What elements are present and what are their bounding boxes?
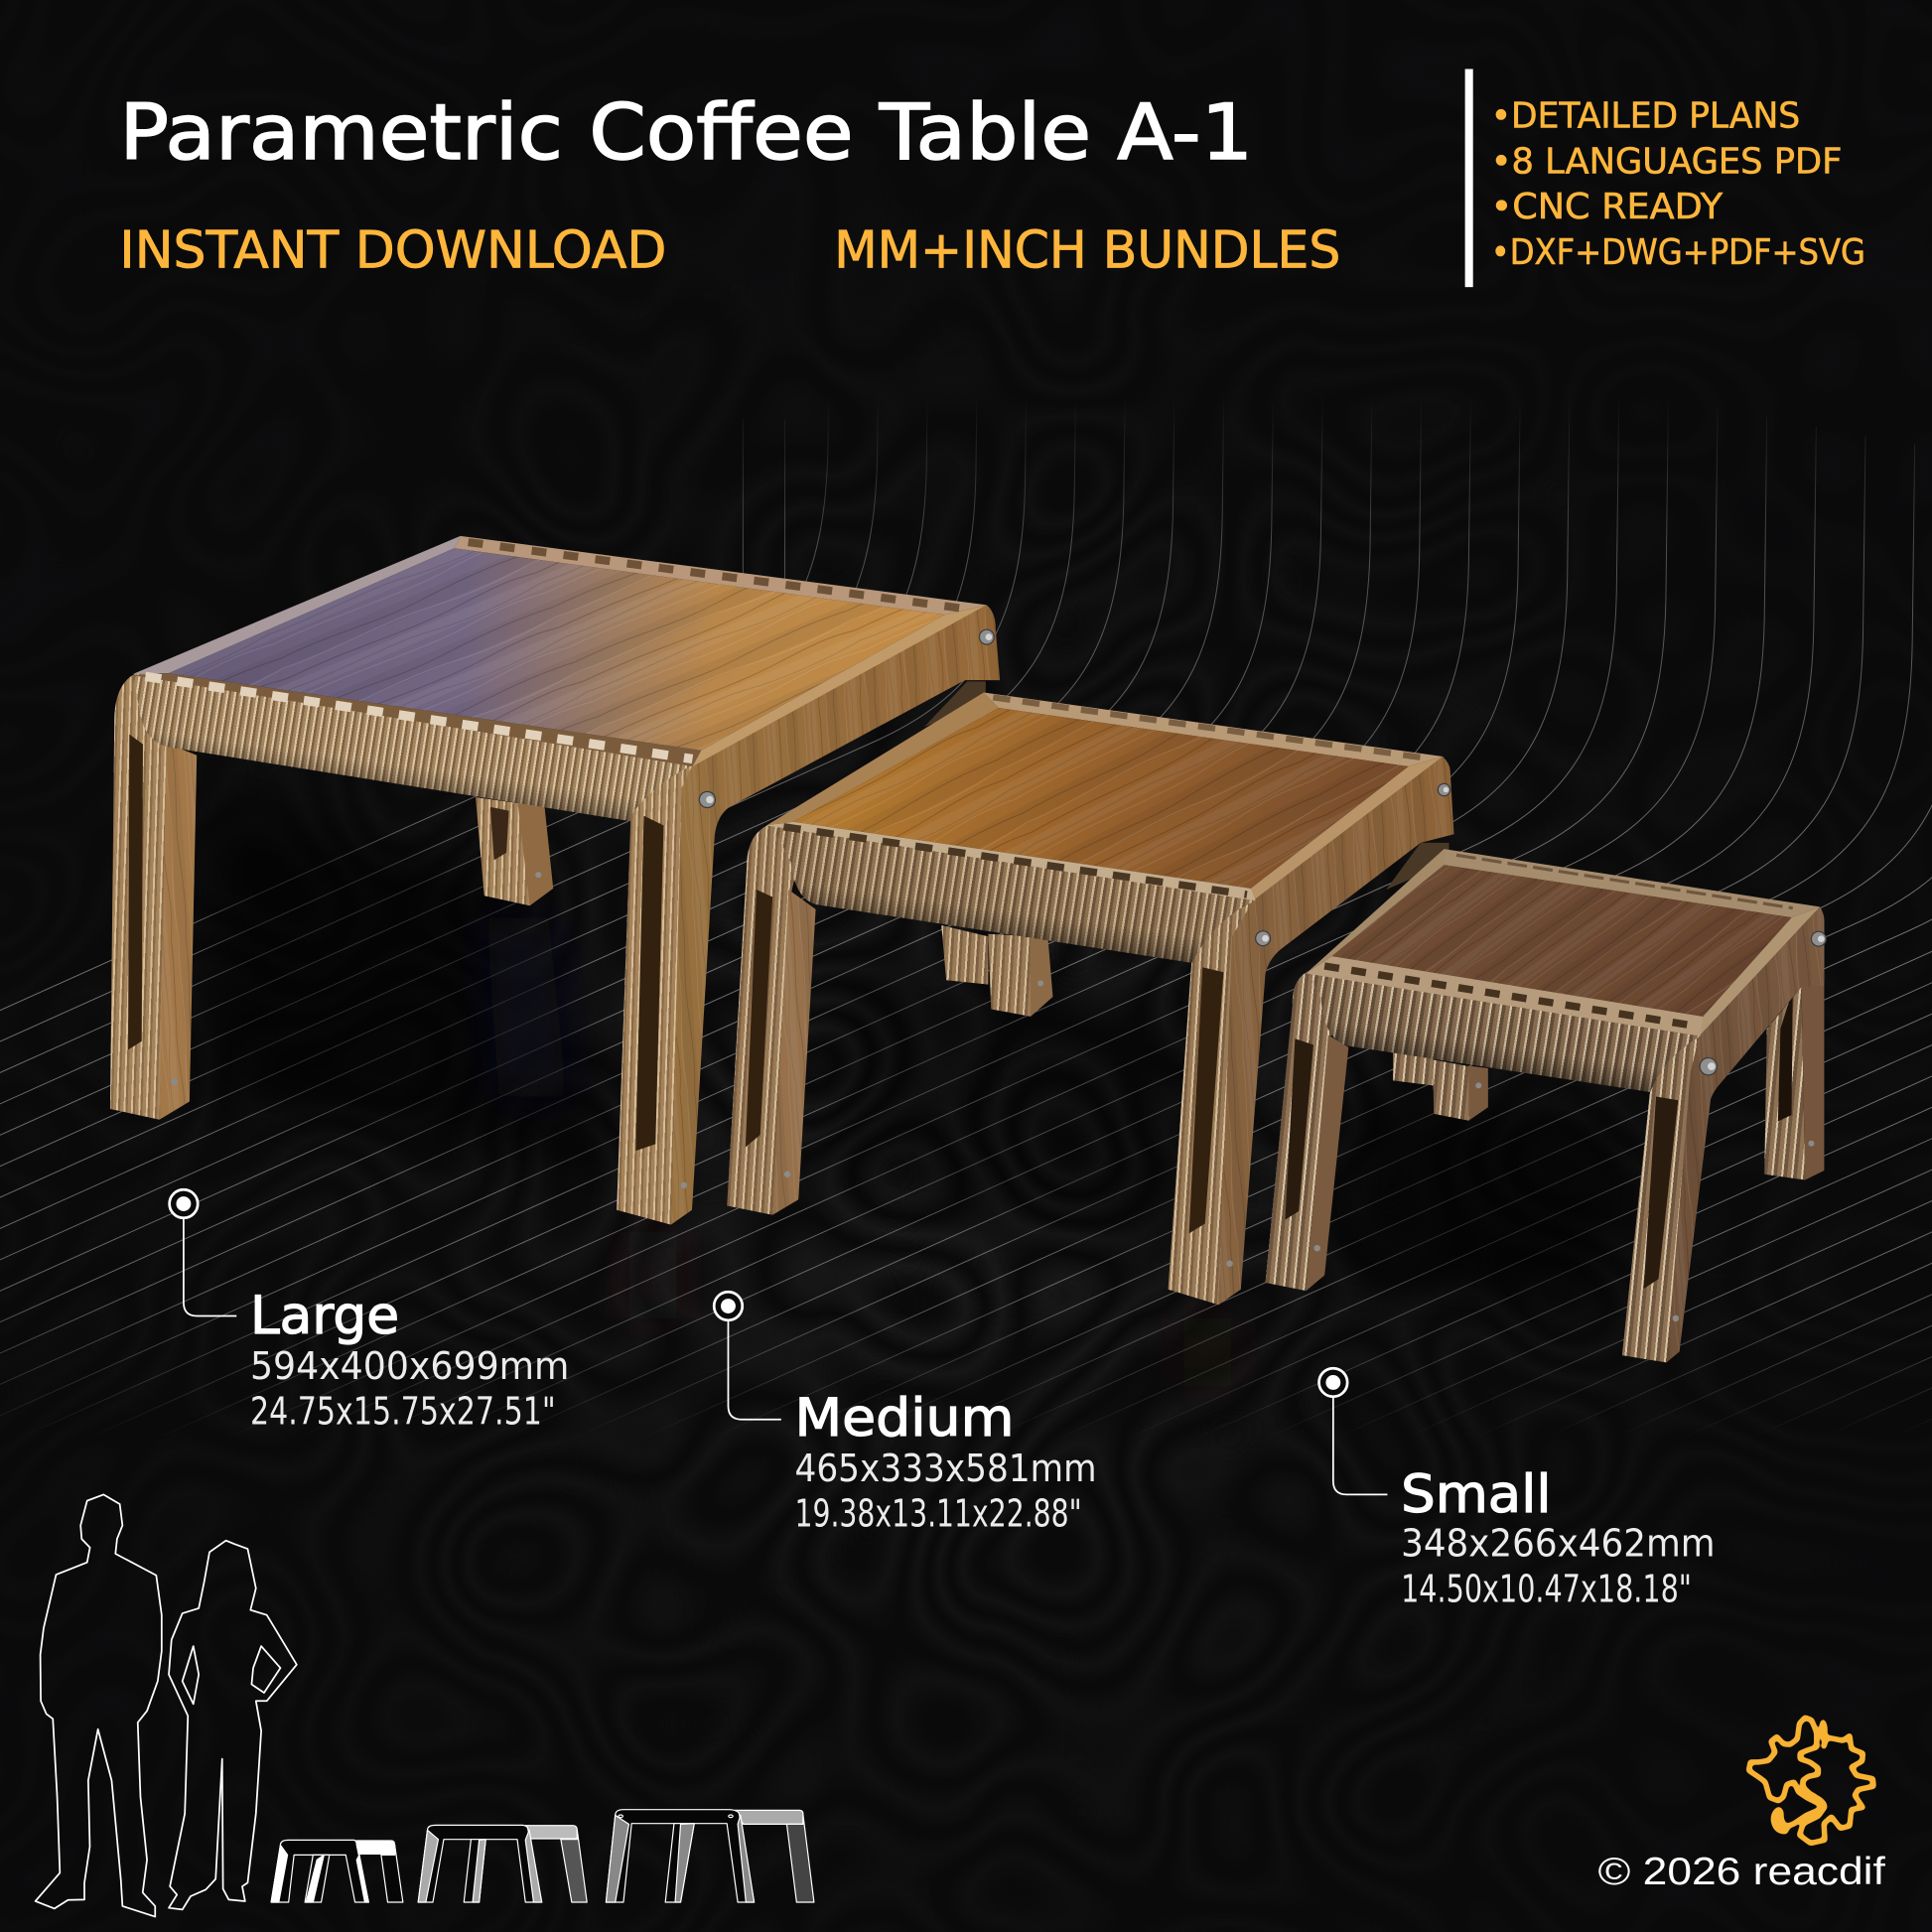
- leader line: large: [184, 1218, 236, 1315]
- medium: front-left leg: [727, 823, 816, 1215]
- table: medium: [727, 692, 1453, 1305]
- marker: small: [1319, 1368, 1347, 1397]
- subheading: bundles: MM+INCH BUNDLES: [834, 220, 1340, 280]
- scale silhouettes: [36, 1494, 297, 1917]
- table: large: [110, 536, 1000, 1225]
- large: rear legs: [476, 681, 986, 905]
- medium: side panel: [1218, 757, 1453, 1305]
- medium: front comb joints: [766, 822, 1256, 900]
- large: slatted front band: [133, 675, 695, 827]
- small: front-left leg: [1266, 970, 1348, 1291]
- leader line: medium: [728, 1320, 781, 1420]
- small: bolts: [1673, 931, 1826, 1321]
- large: front comb joints: [133, 673, 701, 766]
- medium: bolts: [1226, 783, 1450, 1267]
- silhouette: man: [36, 1494, 162, 1917]
- logo: right contour: [1799, 1735, 1873, 1844]
- large: side panel: [671, 605, 1000, 1225]
- medium: rear legs: [941, 843, 1449, 1017]
- mini table outlines: [271, 1810, 814, 1902]
- feature: formats: •DXF+DWG+PDF+SVG: [1491, 232, 1865, 273]
- floor shadows and reflections: [209, 801, 1626, 1386]
- copyright: © 2026 reacdif: [1598, 1851, 1885, 1893]
- large: bolts: [681, 629, 994, 1188]
- marker: medium: [714, 1292, 743, 1320]
- mini table: small: [271, 1840, 403, 1902]
- large: front-left leg: [110, 671, 197, 1120]
- medium: frame rim: [766, 692, 1443, 900]
- feature: languages: •8 LANGUAGES PDF: [1491, 141, 1842, 182]
- small: side panel: [1667, 906, 1824, 1362]
- medium: slatted front band: [771, 824, 1256, 967]
- callout: large: [170, 1189, 569, 1435]
- dimensions: small inch: 14.50x10.47x18.18": [1401, 1567, 1692, 1611]
- feature: detailed plans: •DETAILED PLANS: [1491, 95, 1800, 136]
- feature: cnc: •CNC READY: [1491, 187, 1724, 227]
- small: front comb joints: [1307, 956, 1703, 1036]
- small: frame rim: [1307, 849, 1820, 1036]
- label: medium: Medium: [794, 1389, 1014, 1449]
- small: wood table top: [1332, 865, 1792, 1017]
- large: front-right leg: [617, 763, 705, 1225]
- dimensions: medium mm: 465x333x581mm: [794, 1447, 1097, 1491]
- marker: large: [170, 1189, 198, 1218]
- callout: small: [1319, 1368, 1716, 1611]
- logo: drop tip bottom: [1771, 1807, 1791, 1834]
- large: frame rim: [133, 536, 987, 766]
- label: large: Large: [250, 1287, 399, 1346]
- medium: front-right leg: [1169, 900, 1267, 1305]
- feature list: [1491, 95, 1865, 273]
- large: back comb joints: [469, 542, 973, 610]
- callout: medium: [714, 1292, 1097, 1537]
- dimensions: large inch: 24.75x15.75x27.51": [250, 1390, 556, 1435]
- dimensions: small mm: 348x266x462mm: [1401, 1521, 1716, 1566]
- table: small: [1266, 849, 1826, 1362]
- leader line: small: [1333, 1397, 1387, 1494]
- label: small: Small: [1401, 1465, 1552, 1525]
- dimensions: medium inch: 19.38x13.11x22.88": [794, 1492, 1082, 1537]
- small: rear legs: [1393, 923, 1824, 1179]
- dimensions: large mm: 594x400x699mm: [250, 1344, 569, 1389]
- logo: drop tip top: [1820, 1720, 1828, 1746]
- silhouette: woman: [169, 1541, 297, 1909]
- medium: back comb joints: [993, 697, 1432, 759]
- medium: wood table top: [793, 708, 1409, 889]
- large: wood table top: [169, 548, 944, 751]
- divider: [1465, 69, 1473, 287]
- small: slatted front band: [1309, 972, 1701, 1095]
- floor plank lines: [0, 415, 1932, 1426]
- mini table: large: [606, 1810, 814, 1902]
- mini table: medium: [418, 1825, 587, 1902]
- small: front-right leg: [1622, 1036, 1713, 1362]
- small: back comb joints: [1456, 855, 1793, 908]
- subheading: instant download: INSTANT DOWNLOAD: [119, 220, 666, 280]
- title: Parametric Coffee Table A-1: [119, 88, 1253, 178]
- logo: [1748, 1718, 1873, 1844]
- logo: left contour: [1748, 1718, 1824, 1828]
